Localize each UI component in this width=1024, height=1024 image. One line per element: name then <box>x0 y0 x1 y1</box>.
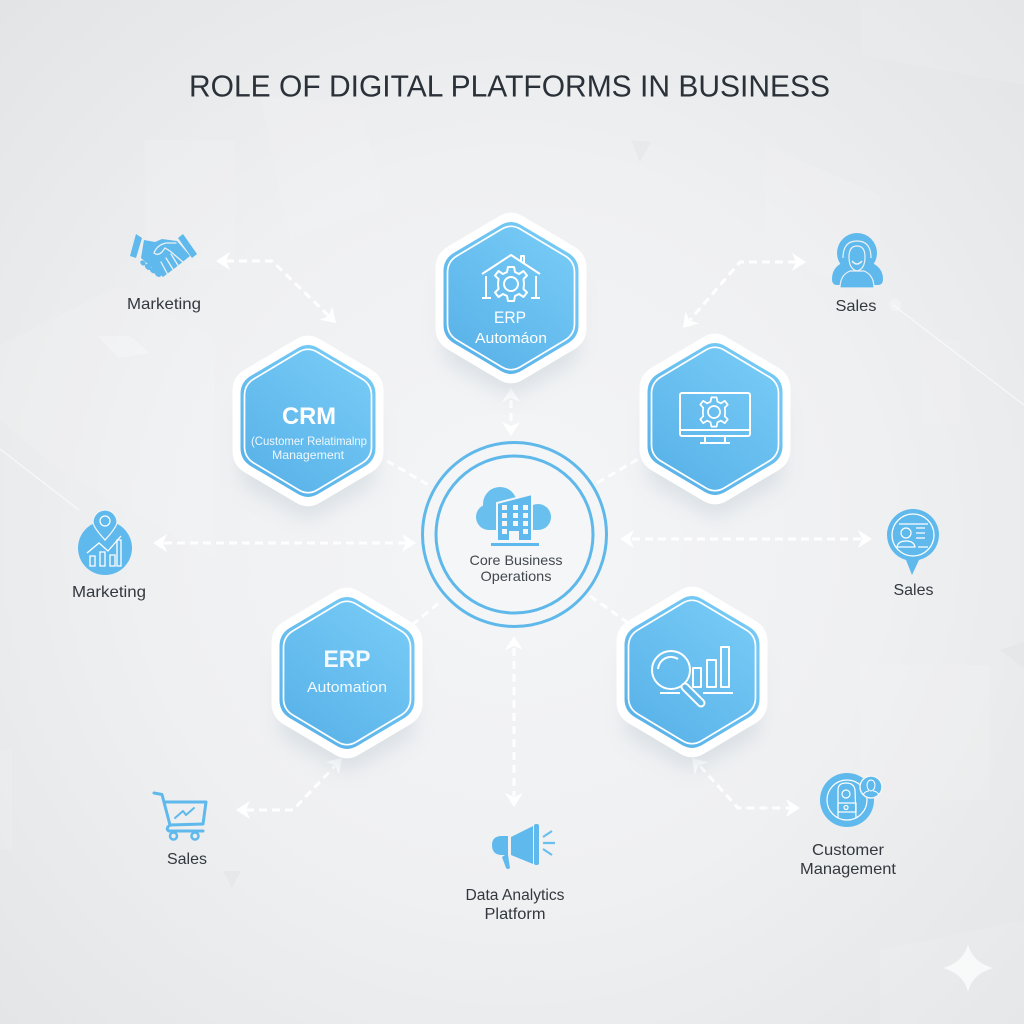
icon: cloud and building <box>476 487 551 546</box>
label: Data Analytics Platform: Platform <box>484 906 546 923</box>
label: CRM: (Customer Relatimalnp <box>251 434 367 448</box>
satellite: Sales profile pin <box>887 509 939 599</box>
label: Sales: Sales <box>836 298 876 315</box>
label: ERP Automation: Automáon <box>475 331 547 347</box>
hexagon: monitor with gear <box>640 334 790 517</box>
label: ERP Automation <box>307 646 387 696</box>
label: ERP Automation: ERP <box>494 308 526 327</box>
connectors <box>153 252 872 819</box>
label: core business operations: Core Business <box>470 552 562 568</box>
center circle: core business operations <box>422 442 606 626</box>
label: ERP Automation <box>475 308 547 347</box>
icon: customer device with avatar <box>820 773 882 827</box>
label: ERP Automation: ERP <box>324 646 370 673</box>
satellite: Data Analytics Platform <box>466 824 565 923</box>
satellite: Customer Management <box>800 773 897 878</box>
icon: shopping cart <box>154 793 206 840</box>
label: Sales: Sales <box>167 851 207 868</box>
label: Sales: Sales <box>894 582 934 599</box>
satellite: Sales headset <box>832 233 883 315</box>
label: Customer Management: Management <box>800 861 897 878</box>
satellite: Marketing handshake <box>127 234 201 313</box>
label: Data Analytics Platform: Data Analytics <box>466 887 565 904</box>
hexagon: ERP Automation lower <box>272 588 422 771</box>
label: CRM <box>251 403 367 462</box>
label: Customer Management: Customer <box>812 842 885 859</box>
hexagon: analytics <box>616 587 768 770</box>
icon: handshake <box>130 234 197 278</box>
satellite: Sales cart <box>154 793 207 868</box>
label: core business operations <box>470 552 562 584</box>
icon: megaphone <box>492 824 555 869</box>
icon: headset agent <box>832 233 883 288</box>
label: CRM: CRM <box>282 403 336 430</box>
satellite: Marketing chart <box>72 510 146 601</box>
title: ROLE OF DIGITAL PLATFORMS IN BUSINESS <box>189 68 830 104</box>
icon: profile pin <box>887 509 939 575</box>
label: Customer Management <box>800 842 897 878</box>
label: Marketing: Marketing <box>127 296 201 313</box>
icon: house with gear <box>482 255 540 301</box>
icon: magnifier with bar chart <box>652 647 733 703</box>
hexagon: CRM <box>232 336 384 519</box>
label: ERP Automation: Automation <box>307 680 387 696</box>
label: Marketing: Marketing <box>72 584 146 601</box>
label: CRM: Management <box>272 448 345 462</box>
label: core business operations: Operations <box>480 568 552 584</box>
icon: chart and location pin <box>78 510 132 575</box>
hexagon: ERP Automation top <box>436 213 586 396</box>
icon: monitor with gear <box>680 393 750 443</box>
label: Data Analytics Platform <box>466 887 565 923</box>
